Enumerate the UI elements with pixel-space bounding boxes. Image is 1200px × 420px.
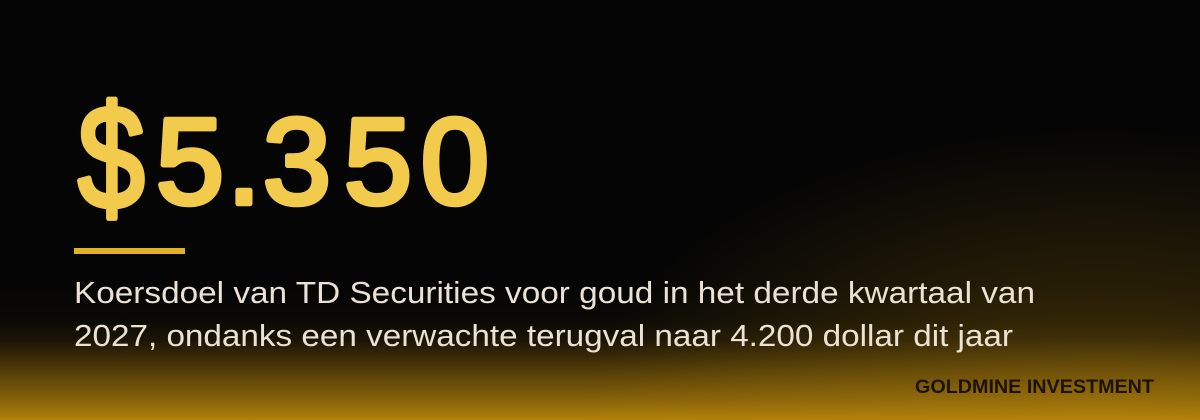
source label: GOLDMINE INVESTMENT — [915, 377, 1154, 398]
headline figure: 5.350 — [156, 94, 489, 230]
description text: Koersdoel van TD Securities voor goud in het derde kwartaal van — [74, 275, 1035, 310]
headline figure — [78, 76, 489, 240]
description text — [74, 275, 1035, 353]
accent rule — [74, 248, 185, 254]
headline figure: $ — [78, 76, 145, 240]
description text: 2027, ondanks een verwachte terugval naar 4.200 dollar dit jaar — [74, 318, 1013, 353]
